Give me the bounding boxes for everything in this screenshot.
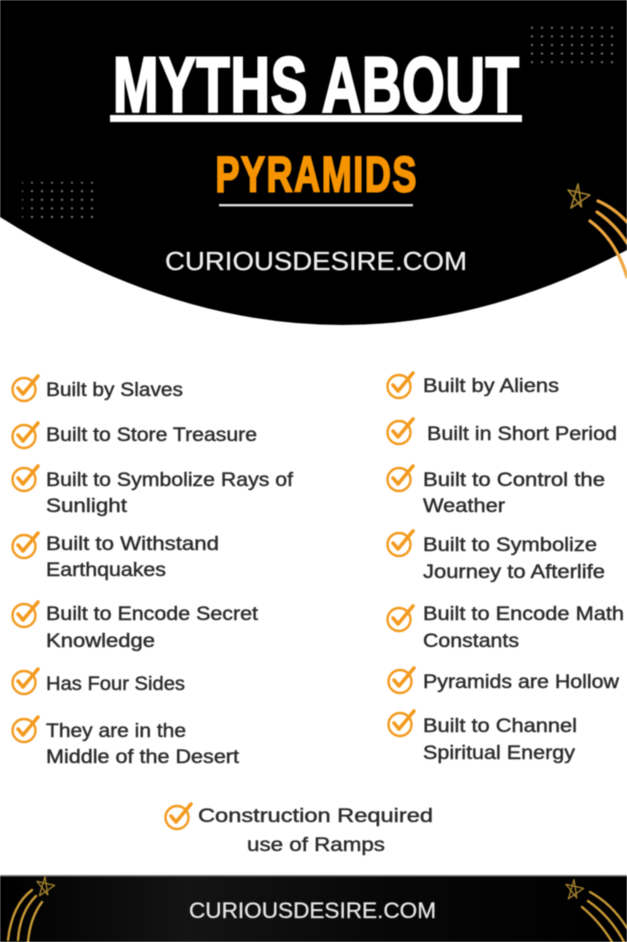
item: built to store treasure: Built to Store Treasure [46, 424, 257, 446]
icon: shooting star top right [568, 184, 627, 277]
website text: CURIOUSDESIRE.COM [165, 246, 467, 276]
item: built to symbolize rays [12, 466, 294, 517]
item: pyramids are hollow: Pyramids are Hollow [423, 671, 620, 693]
item: built by aliens: Built by Aliens [423, 375, 559, 397]
item: journey to afterlife: Built to Symbolize [423, 534, 597, 556]
item: encode secret knowledge: Knowledge [46, 630, 155, 652]
title underline [110, 115, 522, 122]
item: middle of the desert: Middle of the Desert [46, 746, 240, 768]
item: built in short period [388, 419, 617, 445]
item: built to store treasure [12, 423, 257, 448]
item: withstand earthquakes [12, 533, 219, 581]
item: channel spiritual energy [388, 711, 577, 764]
item: journey to afterlife [388, 531, 605, 583]
item: control the weather: Built to Control the [423, 469, 605, 491]
item: encode secret knowledge [12, 602, 259, 652]
item: middle of the desert [12, 717, 240, 768]
item: encode math constants [388, 603, 624, 652]
left column list [12, 376, 294, 768]
footer website text: CURIOUSDESIRE.COM [189, 898, 436, 923]
dot pattern top right [531, 21, 613, 67]
item: encode math constants: Built to Encode Math [423, 603, 624, 625]
item: built by slaves [12, 376, 183, 401]
item: channel spiritual energy: Spiritual Energy [423, 742, 575, 764]
item: control the weather: Weather [423, 495, 506, 517]
item: withstand earthquakes: Built to Withstand [46, 533, 219, 555]
item: control the weather [388, 466, 605, 517]
header black curved panel [0, 0, 627, 325]
item: withstand earthquakes: Earthquakes [46, 559, 166, 581]
item: built by aliens [388, 373, 559, 398]
subtitle underline [219, 204, 413, 206]
item: construction required ramps [166, 804, 433, 856]
icon: shooting star footer right [566, 880, 627, 942]
title: MYTHS ABOUT [113, 42, 519, 129]
item: has four sides: Has Four Sides [46, 673, 185, 695]
item: built in short period: Built in Short Period [427, 423, 617, 445]
item: construction required ramps: use of Ramps [247, 834, 385, 856]
item: construction required ramps: Construction Required [198, 805, 433, 827]
right column list [388, 373, 624, 764]
item: channel spiritual energy: Built to Channel [423, 715, 577, 737]
item: encode secret knowledge: Built to Encode Secret [46, 603, 259, 625]
dot pattern left [22, 182, 98, 224]
item: built to symbolize rays: Built to Symbolize Rays of [46, 469, 294, 491]
item: middle of the desert: They are in the [46, 720, 186, 742]
footer bar [0, 875, 627, 942]
subtitle: PYRAMIDS [216, 148, 416, 203]
item: encode math constants: Constants [423, 630, 519, 652]
item: built by slaves: Built by Slaves [46, 379, 183, 401]
icon: shooting star footer left [8, 877, 55, 942]
item: journey to afterlife: Journey to Afterlife [423, 561, 605, 583]
item: pyramids are hollow [388, 668, 620, 693]
item: built to symbolize rays: Sunlight [46, 495, 128, 517]
item: has four sides [12, 669, 185, 695]
